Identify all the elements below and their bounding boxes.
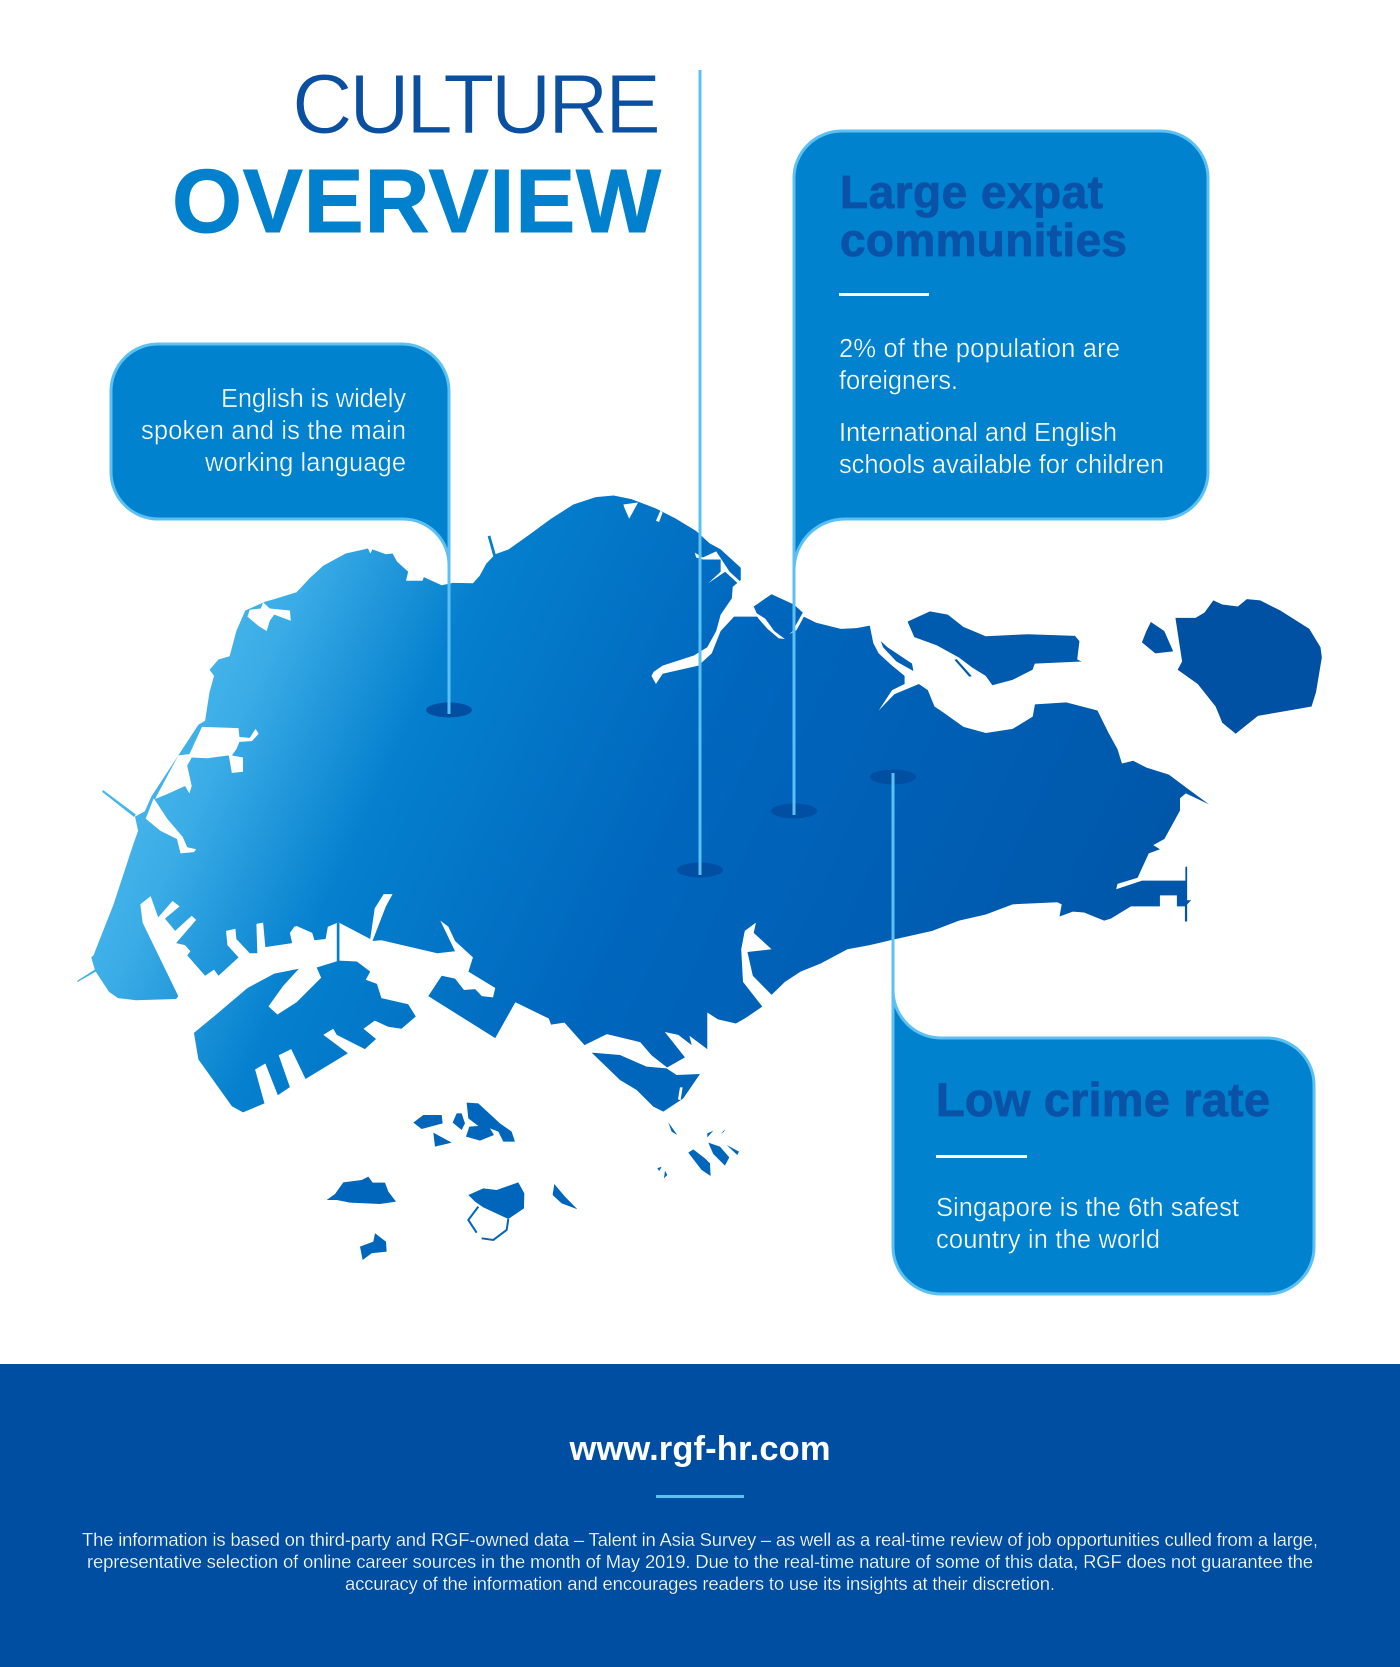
title: OVERVIEW (172, 152, 661, 252)
disclaimer: representative selection of online career sources in the month of May 2019. Due to the real-time nature of some of this data, RGF does not guarantee the (87, 1551, 1313, 1572)
heading: Large expat (840, 166, 1103, 218)
callout box with tail (111, 344, 449, 566)
callout text: Singapore is the 6th safest (936, 1194, 1239, 1222)
footer divider (656, 1495, 744, 1498)
divider (839, 293, 929, 296)
callout box with tail (794, 131, 1208, 570)
pole (892, 773, 894, 1247)
callout: Large expat communities (771, 131, 1208, 818)
callout text: working language (204, 449, 406, 477)
callout text: English is widely (221, 385, 406, 413)
map of Singapore (77, 496, 1322, 1260)
callout text (936, 1194, 1239, 1254)
callout text: schools available for children (839, 451, 1164, 479)
callout text: country in the world (936, 1226, 1160, 1254)
pole (448, 391, 450, 714)
pin marker (426, 702, 472, 718)
centre pin pole (677, 70, 723, 878)
reservoirs and inlets (146, 502, 805, 1007)
heading: Low crime rate (936, 1073, 1270, 1126)
title (172, 57, 661, 252)
southern islands (327, 1053, 739, 1260)
footer band (0, 1364, 1400, 1667)
pin marker (870, 770, 916, 784)
title: CULTURE (292, 57, 661, 151)
callout: English language (111, 344, 472, 718)
divider (936, 1155, 1027, 1158)
website url: www.rgf-hr.com (568, 1430, 830, 1468)
disclaimer (82, 1529, 1318, 1594)
callout text (839, 335, 1164, 479)
pole (792, 178, 796, 815)
callout text (141, 385, 406, 477)
eastern islands (881, 599, 1322, 734)
callout box with tail (893, 990, 1314, 1294)
callout text: 2% of the population are (839, 335, 1120, 363)
disclaimer: The information is based on third-party and RGF-owned data – Talent in Asia Survey – as well as a real-time review of job opportunities culled from a large, (82, 1529, 1318, 1550)
main island and Jurong island (77, 496, 1209, 1112)
heading (840, 166, 1127, 266)
callout text: foreigners. (839, 367, 958, 395)
heading: communities (840, 214, 1127, 266)
pin marker (771, 804, 817, 818)
callout text: International and English (839, 419, 1117, 447)
disclaimer: accuracy of the information and encourages readers to use its insights at their discretion. (345, 1573, 1055, 1594)
callout: Low crime rate (870, 770, 1314, 1294)
callout text: spoken and is the main (141, 417, 406, 445)
